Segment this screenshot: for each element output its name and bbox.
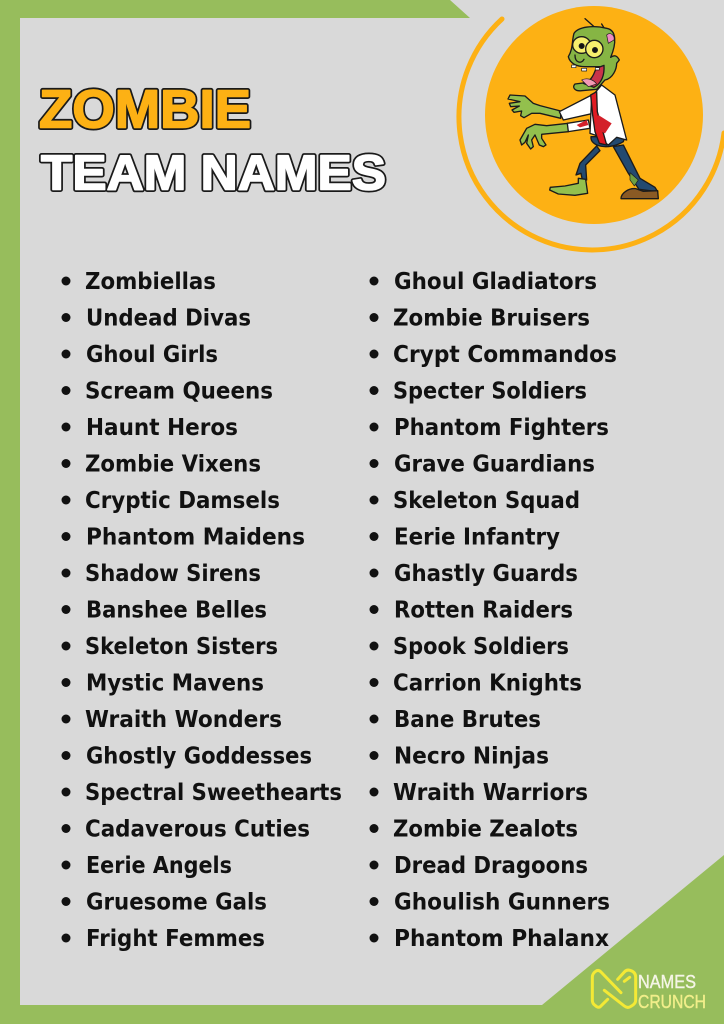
list: left column names: Gruesome Gals — [86, 888, 267, 916]
list: right column names: Rotten Raiders — [394, 596, 573, 624]
orange circle — [485, 6, 703, 224]
list: left column names — [62, 267, 342, 952]
list: left column names: Cadaverous Cuties — [85, 814, 310, 842]
logo text: NAMES: NAMES — [638, 972, 696, 992]
list: left column names: Spectral Sweethearts — [85, 778, 342, 806]
list: left column names: Eerie Angels — [86, 851, 232, 879]
list: left column names: Zombiellas — [85, 267, 216, 295]
list: left column names: Fright Femmes — [86, 924, 265, 952]
list: right column names: Spook Soldiers — [393, 632, 569, 660]
list: right column names: Zombie Bruisers — [393, 304, 590, 332]
list: right column names — [370, 267, 617, 952]
list: left column names: Mystic Mavens — [86, 668, 264, 696]
icon: zombie illustration — [508, 19, 658, 199]
list: right column names: Ghoulish Gunners — [394, 888, 610, 916]
list: left column names: Scream Queens — [85, 376, 273, 404]
list: left column names: Ghoul Girls — [86, 340, 218, 368]
list: right column names: Skeleton Squad — [393, 486, 580, 514]
list: left column names: Undead Divas — [86, 304, 251, 332]
list: left column names: Ghostly Goddesses — [86, 742, 312, 770]
orange ring arc — [459, 19, 724, 250]
list: left column names: Haunt Heros — [86, 413, 238, 441]
list: right column names: Necro Ninjas — [394, 742, 549, 770]
list: right column names: Carrion Knights — [393, 668, 582, 696]
list: right column names: Ghastly Guards — [394, 559, 578, 587]
heading: ZOMBIE: ZOMBIE — [39, 80, 251, 140]
icon: logo N mark — [592, 970, 636, 1007]
list: right column names: Specter Soldiers — [393, 376, 587, 404]
logo: Names Crunch — [592, 970, 706, 1012]
list: right column names: Phantom Phalanx — [394, 924, 609, 952]
list: left column names: Phantom Maidens — [86, 522, 305, 550]
list: right column names: Grave Guardians — [394, 450, 595, 478]
list: right column names: Crypt Commandos — [393, 340, 617, 368]
list: left column names: Banshee Belles — [86, 596, 267, 624]
list: right column names: Eerie Infantry — [394, 522, 560, 550]
heading: TEAM NAMES: TEAM NAMES — [41, 146, 386, 200]
list: left column names: Cryptic Damsels — [85, 486, 280, 514]
list: right column names: Phantom Fighters — [394, 413, 609, 441]
list: left column names: Zombie Vixens — [85, 450, 261, 478]
list: left column names: Shadow Sirens — [85, 559, 261, 587]
list: right column names: Bane Brutes — [394, 705, 541, 733]
list: right column names: Dread Dragoons — [394, 851, 588, 879]
list: right column names: Zombie Zealots — [393, 814, 578, 842]
heading: ZOMBIE: ZOMBIE — [39, 80, 251, 140]
list: right column names: Ghoul Gladiators — [394, 267, 597, 295]
list: left column names: Skeleton Sisters — [85, 632, 278, 660]
list: right column names: Wraith Warriors — [393, 778, 588, 806]
logo text: CRUNCH: CRUNCH — [638, 992, 706, 1012]
list: left column names: Wraith Wonders — [85, 705, 282, 733]
heading: TEAM NAMES: TEAM NAMES — [41, 146, 386, 200]
